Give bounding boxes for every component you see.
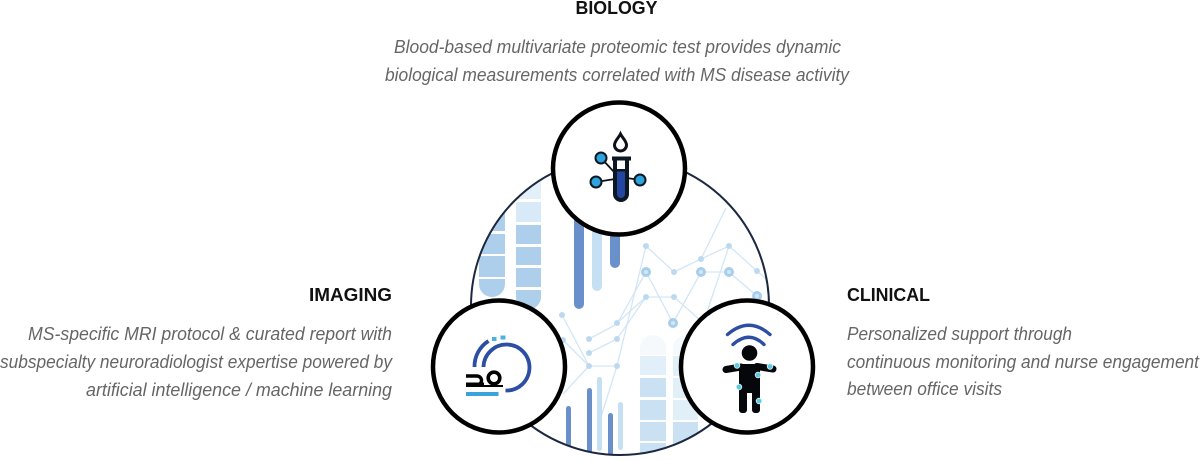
chart nodes: [559, 243, 760, 369]
text block: clinical description: [847, 323, 1200, 399]
text block: biology description: [385, 36, 851, 85]
chart: central data collage circle: [470, 172, 770, 456]
panel: clinical text: [847, 285, 1200, 399]
icon: test tube with drop: [590, 134, 646, 200]
heading: imaging: IMAGING: [309, 285, 392, 305]
panel: imaging text: [0, 285, 394, 400]
text block: biology description: biological measurements correlated with MS disease activity: [385, 64, 851, 85]
bottom bars: [566, 377, 623, 458]
left segmented columns: [479, 181, 541, 308]
icon: MRI scanner: [466, 336, 529, 396]
text block: imaging description: artificial intelligence / machine learning: [86, 379, 393, 400]
right segmented columns: [640, 335, 698, 458]
hanging bars: [574, 220, 620, 309]
icon circle: biology: [553, 102, 685, 234]
text block: imaging description: MS-specific MRI protocol & curated report with: [28, 323, 392, 344]
text block: imaging description: [0, 323, 394, 400]
text block: biology description: Blood-based multivariate proteomic test provides dynamic: [394, 36, 842, 57]
line charts: [562, 208, 766, 416]
text block: imaging description: subspecialty neuroradiologist expertise powered by: [0, 351, 394, 372]
heading: clinical: CLINICAL: [847, 285, 930, 305]
panel: biology text: [385, 0, 851, 85]
icon: person with wearable sensors: [726, 325, 773, 413]
icon circle: imaging: [433, 300, 565, 432]
text block: clinical description: between office visits: [847, 378, 1002, 399]
text block: clinical description: Personalized support through: [847, 323, 1072, 344]
icon circle: clinical: [681, 300, 813, 432]
